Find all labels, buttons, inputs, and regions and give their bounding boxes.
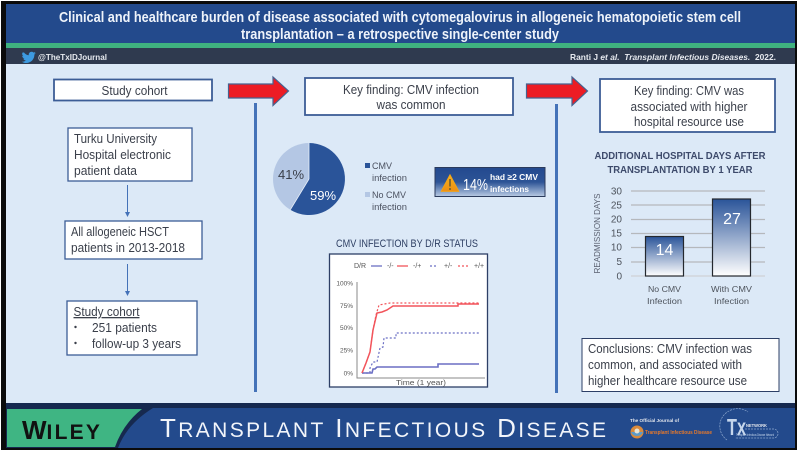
TxNetwork logo — [720, 409, 778, 440]
heading box: key finding 2: associated with higher — [630, 99, 748, 114]
series: -/+ — [362, 304, 479, 373]
bar chart: readmission days: 15 — [611, 228, 622, 240]
line chart: CMV infection by D/R status — [330, 254, 488, 387]
official journal note: Transplant Infectious Disease — [645, 430, 712, 436]
flow box: study cohort details: 251 patients — [92, 320, 157, 335]
y axis title: READMISSION DAYS — [592, 193, 602, 274]
flow box: study cohort details: Study cohort — [74, 304, 140, 319]
flow box: data source: patient data — [74, 163, 138, 178]
bar chart: readmission days: 30 — [611, 186, 622, 198]
header: title banner — [6, 4, 795, 48]
x labels: No CMV — [648, 284, 681, 294]
chart legend: -/- — [387, 263, 394, 270]
flow box: patients — [65, 221, 202, 259]
pie legend: infection — [372, 202, 407, 212]
bar chart title: ADDITIONAL HOSPITAL DAYS AFTER — [594, 151, 766, 162]
bar chart: readmission days: 5 — [616, 257, 622, 268]
footer banner — [6, 403, 795, 448]
callout: 14% repeat infections: infections — [490, 184, 529, 194]
y axis labels — [336, 280, 353, 378]
x labels — [647, 284, 752, 306]
heading box: key finding 1 — [305, 78, 513, 115]
heading box: key finding 2: hospital resource use — [634, 114, 744, 129]
chart legend: +/+ — [474, 263, 484, 270]
arrow: flow 1 — [125, 185, 130, 217]
callout: 14% repeat infections: had ≥2 CMV — [490, 172, 538, 182]
x axis label: Time (1 year) — [396, 378, 447, 387]
flow box: data source — [68, 128, 192, 181]
bar: with CMV — [712, 199, 750, 276]
bar chart: readmission days: 25 — [611, 200, 622, 212]
y axis labels: 75% — [340, 303, 353, 310]
flow box: data source: Hospital electronic — [74, 147, 171, 162]
green logo panel — [7, 409, 142, 447]
bar: no CMV: 14 — [656, 242, 674, 259]
heading box: study cohort — [54, 80, 212, 100]
y axis labels: 0% — [344, 370, 353, 378]
x labels: Infection — [714, 296, 749, 306]
flow box: study cohort details — [67, 301, 197, 355]
chart legend: -/+ — [413, 263, 421, 270]
bar chart title: TRANSPLANTATION BY 1 YEAR — [608, 165, 753, 176]
pie chart: 41% — [278, 167, 304, 182]
callout: 14% repeat infections — [435, 168, 545, 196]
citation bar — [6, 48, 795, 64]
bar chart: readmission days: 20 — [611, 214, 622, 226]
pie chart: 59% — [310, 188, 336, 203]
bar chart title — [594, 151, 766, 176]
heading box: key finding 1: was common — [376, 97, 446, 112]
title — [59, 10, 741, 43]
TxNetwork logo: Transplant Infectious Disease Network — [736, 433, 774, 437]
pie chart — [273, 143, 345, 215]
x labels: With CMV — [711, 284, 752, 294]
heading box: study cohort: Study cohort — [102, 83, 168, 98]
TxNetwork logo: Tx — [727, 414, 746, 440]
pie legend — [365, 161, 407, 212]
chart legend: D/R — [354, 263, 366, 270]
y axis labels: 100% — [336, 280, 353, 288]
flow box: patients: All allogeneic HSCT — [71, 224, 169, 239]
series: +/+ — [362, 303, 479, 373]
heading box: key finding 2: Key finding: CMV was — [634, 83, 744, 98]
divider line 1 — [254, 103, 257, 392]
series: +/- — [362, 333, 479, 373]
bar: with CMV: 27 — [723, 211, 741, 228]
series: -/- — [362, 364, 479, 373]
y axis labels: 50% — [340, 325, 353, 332]
Wiley logo: WILEY — [22, 415, 102, 445]
pie legend: infection — [372, 173, 407, 183]
chart axes — [357, 282, 485, 378]
icon: twitter bird — [22, 52, 36, 63]
title: transplantation – a retrospective single-center study — [241, 27, 559, 43]
pie legend: No CMV — [372, 190, 406, 200]
y axis labels: 25% — [340, 348, 353, 354]
flow box: data source: Turku University — [74, 131, 157, 146]
flow box: patients: patients in 2013-2018 — [71, 240, 185, 255]
journal name: TRANSPLANT INFECTIOUS DISEASE — [160, 413, 606, 443]
conclusions box: Conclusions: CMV infection was — [588, 341, 752, 356]
callout: 14% repeat infections: 14% — [463, 177, 488, 194]
panel: main background — [6, 64, 795, 403]
official journal note: The Official Journal of — [630, 418, 680, 423]
official journal note — [630, 418, 712, 438]
chart legend — [354, 263, 484, 270]
conclusions box: common, and associated with — [588, 357, 742, 372]
arrow: flow 2 — [125, 264, 130, 296]
arrow: red 1 — [228, 77, 288, 106]
flow box: study cohort details: follow-up 3 years — [92, 336, 181, 351]
icon: society logo — [630, 426, 644, 438]
icon: warning triangle — [441, 174, 459, 192]
bar chart: readmission days — [592, 186, 765, 306]
heading box: key finding 1: Key finding: CMV infection — [343, 82, 479, 97]
x labels: Infection — [647, 296, 682, 306]
conclusions box: higher healthcare resource use — [588, 373, 747, 388]
bar chart: readmission days: 10 — [611, 242, 622, 254]
chart title: D/R status: CMV INFECTION BY D/R STATUS — [336, 238, 478, 250]
chart legend: +/- — [444, 263, 453, 270]
divider line 2 — [555, 104, 558, 393]
bar: no CMV — [646, 236, 684, 276]
gridlines and y axis — [631, 191, 765, 276]
citation: Ranti J et al. Transplant Infectious Diseases. 2022. — [570, 52, 776, 62]
pie legend: CMV — [372, 161, 392, 171]
heading box: key finding 2 — [600, 79, 775, 132]
bar chart: readmission days: 0 — [616, 272, 622, 282]
twitter handle: @TheTxIDJournal — [38, 52, 107, 62]
arrow: red 2 — [526, 77, 588, 106]
TxNetwork logo: NETWORK — [746, 423, 768, 428]
conclusions box — [582, 338, 779, 392]
